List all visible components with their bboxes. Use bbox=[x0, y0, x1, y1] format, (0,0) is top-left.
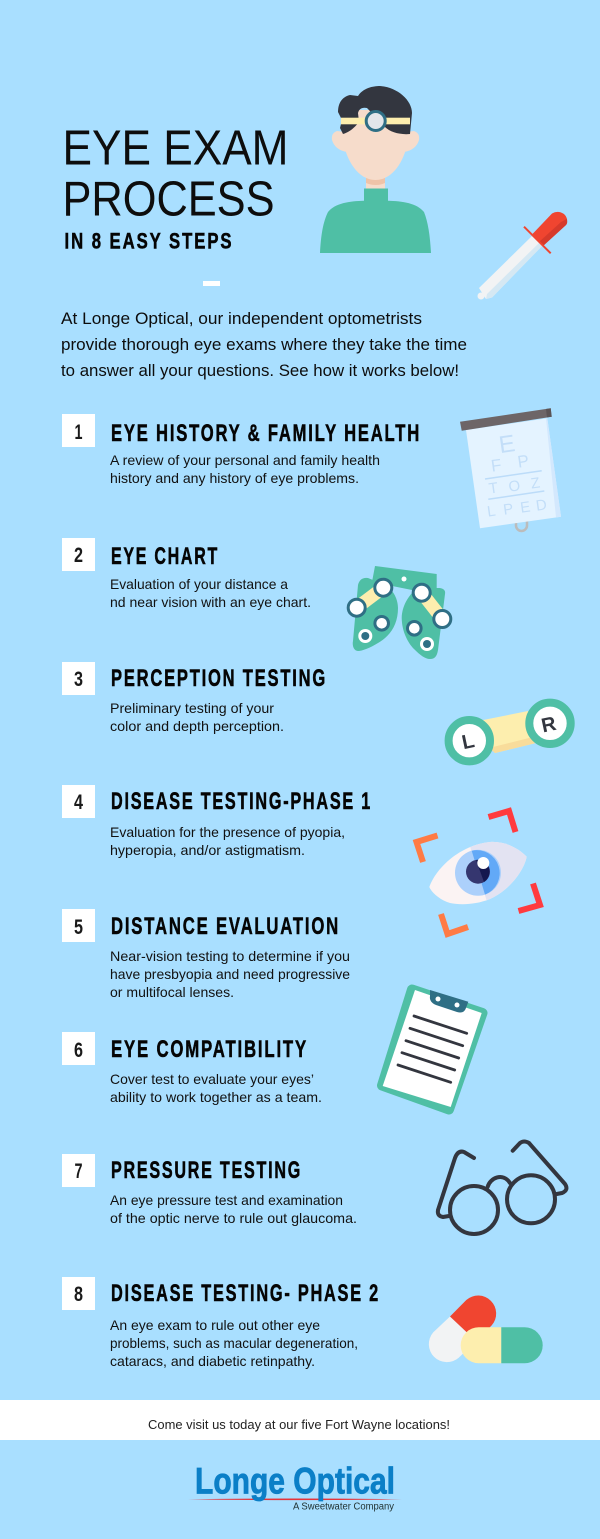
title: IN 8 EASY STEPS bbox=[64, 228, 234, 253]
icon: eye chart: E bbox=[519, 498, 532, 517]
step 5: or multifocal lenses. bbox=[110, 984, 234, 1000]
step 2: Evaluation of your distance a bbox=[110, 576, 288, 592]
step 5: Near-vision testing to determine if you bbox=[110, 948, 350, 964]
step 4: Evaluation for the presence of pyopia, bbox=[110, 824, 345, 840]
intro text: provide thorough eye exams where they take the time bbox=[61, 335, 467, 354]
step 5 bbox=[62, 909, 350, 1000]
step 7: An eye pressure test and examination bbox=[110, 1192, 343, 1208]
step 8: problems, such as macular degeneration, bbox=[110, 1335, 358, 1351]
step 2: 2 bbox=[74, 544, 83, 567]
logo bbox=[188, 1460, 402, 1512]
icon: eye chart: E bbox=[497, 430, 517, 459]
icon: L/R lens bbox=[449, 703, 571, 761]
step 7: of the optic nerve to rule out glaucoma. bbox=[110, 1210, 357, 1226]
step 8: cataracs, and diabetic retinpathy. bbox=[110, 1353, 315, 1369]
icon: eye chart: L bbox=[486, 503, 497, 521]
step 3: 3 bbox=[74, 668, 83, 691]
step 8: 8 bbox=[74, 1283, 83, 1306]
step 2: EYE CHART bbox=[111, 543, 219, 570]
step 3 bbox=[62, 662, 327, 734]
icon: pills bbox=[429, 1296, 543, 1363]
icon: eye chart: Z bbox=[530, 474, 541, 493]
step 3: Preliminary testing of your bbox=[110, 700, 274, 716]
divider dash bbox=[203, 281, 220, 286]
step 6: 6 bbox=[74, 1039, 83, 1062]
icon: L/R lens: R bbox=[539, 713, 559, 737]
step 6 bbox=[62, 1032, 322, 1105]
step 8 bbox=[62, 1277, 380, 1369]
intro text bbox=[61, 309, 467, 380]
step 6: Cover test to evaluate your eyes’ bbox=[110, 1071, 314, 1087]
step 1: 1 bbox=[74, 421, 83, 444]
step 7 bbox=[62, 1154, 357, 1226]
icon: eye chart: T bbox=[488, 479, 499, 498]
step 3: PERCEPTION TESTING bbox=[111, 665, 327, 692]
step 5: 5 bbox=[74, 916, 83, 939]
step 6: ability to work together as a team. bbox=[110, 1089, 322, 1105]
footer band bbox=[0, 1400, 600, 1440]
icon: eye chart: P bbox=[516, 451, 530, 472]
icon: doctor bbox=[320, 86, 431, 253]
icon: clipboard bbox=[382, 990, 482, 1110]
step 4: 4 bbox=[74, 791, 83, 814]
icon: eye chart bbox=[460, 408, 561, 531]
step 4 bbox=[62, 785, 372, 858]
step 7: PRESSURE TESTING bbox=[111, 1157, 302, 1184]
title: PROCESS bbox=[62, 172, 274, 226]
step 1: EYE HISTORY & FAMILY HEALTH bbox=[111, 420, 421, 447]
step 4: DISEASE TESTING-PHASE 1 bbox=[111, 788, 372, 815]
icon: L/R lens: L bbox=[460, 730, 477, 754]
icon: eye dropper bbox=[478, 212, 567, 300]
step 6: EYE COMPATIBILITY bbox=[111, 1036, 308, 1063]
logo: A Sweetwater Company bbox=[293, 1502, 394, 1512]
icon: eye chart: F bbox=[490, 455, 503, 476]
icon: phoropter bbox=[348, 566, 451, 659]
step 2 bbox=[62, 538, 311, 610]
icon: glasses bbox=[438, 1142, 566, 1234]
footer band: Come visit us today at our five Fort Wayne locations! bbox=[148, 1417, 450, 1432]
step 2: nd near vision with an eye chart. bbox=[110, 594, 311, 610]
intro text: At Longe Optical, our independent optometrists bbox=[61, 309, 422, 328]
step 5: have presbyopia and need progressive bbox=[110, 966, 350, 982]
title: EYE EXAM bbox=[62, 120, 288, 175]
step 1 bbox=[62, 414, 421, 486]
step 4: hyperopia, and/or astigmatism. bbox=[110, 842, 305, 858]
icon: eye with focus brackets bbox=[416, 811, 540, 934]
icon: eye chart: O bbox=[507, 477, 521, 496]
icon: eye chart: D bbox=[535, 496, 548, 515]
step 5: DISTANCE EVALUATION bbox=[111, 913, 340, 940]
step 8: An eye exam to rule out other eye bbox=[110, 1317, 320, 1333]
step 1: history and any history of eye problems. bbox=[110, 470, 359, 486]
step 1: A review of your personal and family health bbox=[110, 452, 380, 468]
step 7: 7 bbox=[74, 1160, 82, 1183]
step 3: color and depth perception. bbox=[110, 718, 284, 734]
title bbox=[62, 120, 288, 253]
logo: Longe Optical bbox=[195, 1460, 395, 1502]
intro text: to answer all your questions. See how it works below! bbox=[61, 361, 459, 380]
icon: eye chart: P bbox=[502, 500, 515, 519]
step 8: DISEASE TESTING- PHASE 2 bbox=[111, 1280, 380, 1307]
